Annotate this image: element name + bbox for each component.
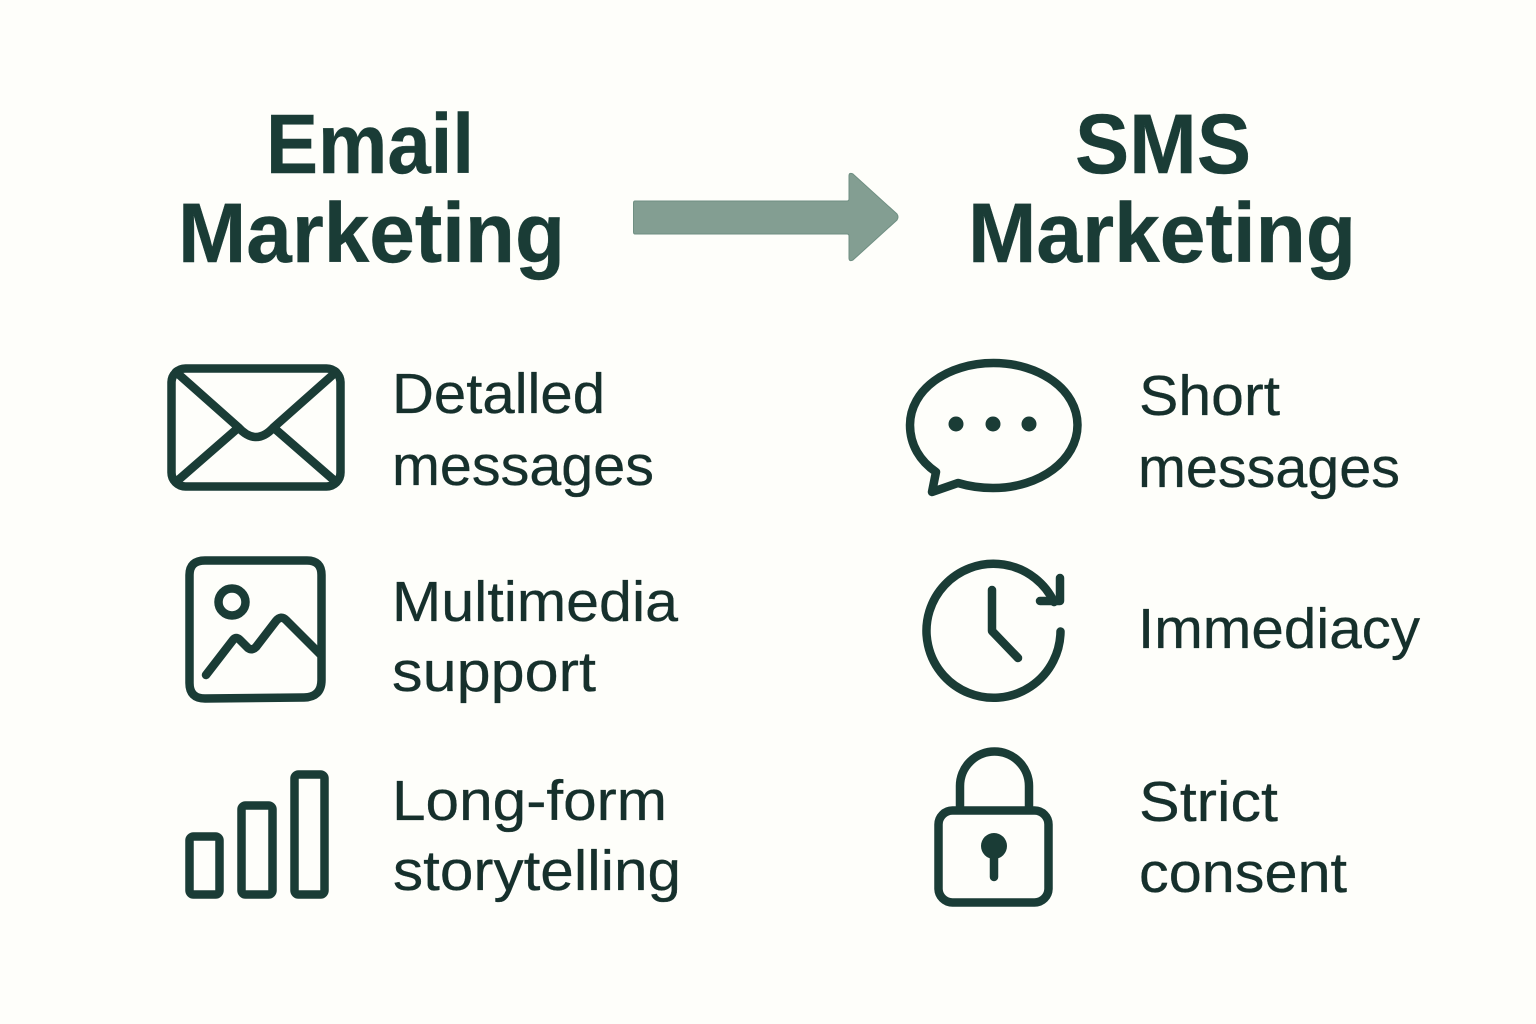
text: Multimedia support	[392, 570, 678, 704]
heading: SMS Marketing	[968, 97, 1356, 280]
text: Short messages	[1138, 364, 1400, 500]
text: Long-form storytelling	[392, 769, 681, 903]
heading: SMS Marketing: Marketing	[968, 186, 1356, 280]
heading: SMS Marketing: SMS	[1075, 97, 1251, 191]
text: Detalled messages: Detalled	[392, 362, 605, 426]
text: Strict consent: consent	[1139, 841, 1347, 905]
text: Multimedia support: Multimedia	[392, 570, 678, 634]
text: Strict consent: Strict	[1139, 770, 1278, 834]
text: Immediacy: Immediacy	[1138, 597, 1420, 661]
icon: envelope	[172, 368, 340, 486]
panel: email marketing	[172, 97, 681, 903]
panel: sms marketing	[910, 97, 1420, 905]
icon: bar chart	[190, 774, 324, 894]
heading: Email Marketing: Marketing	[178, 186, 565, 280]
text: Detalled messages	[392, 362, 654, 498]
text: Short messages: Short	[1139, 364, 1280, 428]
heading: Email Marketing: Email	[266, 97, 474, 191]
text: Long-form storytelling: storytelling	[393, 839, 681, 903]
text: Multimedia support: support	[392, 640, 596, 704]
text: Strict consent	[1139, 770, 1347, 905]
text: Long-form storytelling: Long-form	[392, 769, 667, 833]
icon: padlock	[938, 752, 1048, 902]
icon: clock with arrow	[927, 564, 1060, 698]
text: Short messages: messages	[1138, 436, 1400, 500]
heading: Email Marketing	[178, 97, 565, 280]
text: Detalled messages: messages	[392, 434, 654, 498]
icon: image	[190, 560, 322, 698]
icon: speech bubble	[910, 363, 1078, 492]
arrow: email to SMS	[634, 173, 898, 261]
